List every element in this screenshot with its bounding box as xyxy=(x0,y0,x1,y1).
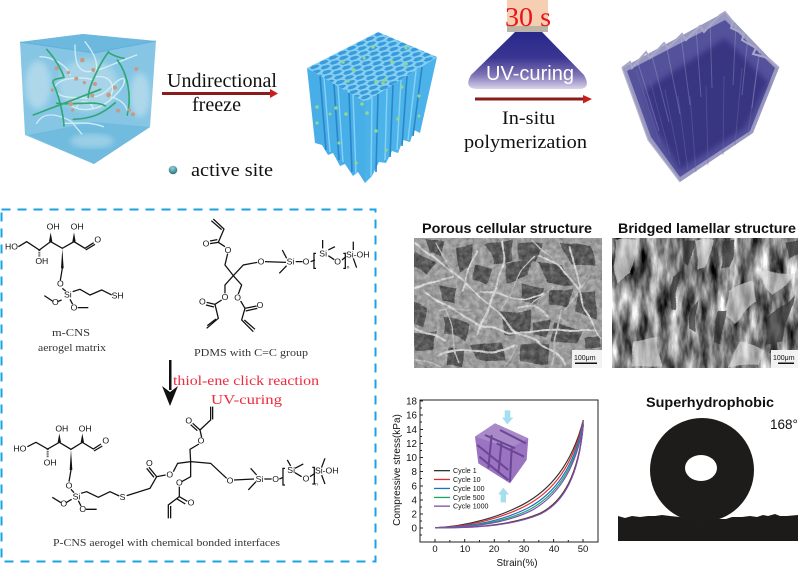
molecule: PDMS with C=C: O xyxy=(258,257,265,267)
x tick labels xyxy=(432,544,588,555)
molecule: m-CNS: OH xyxy=(47,222,60,232)
caption: m-CNS aerogel matrix: aerogel matrix xyxy=(38,343,107,354)
y tick labels: 0 xyxy=(412,524,418,534)
y tick labels: 16 xyxy=(406,410,418,422)
molecule: PDMS with C=C: O xyxy=(234,293,241,303)
honeycomb aerogel cube xyxy=(307,32,437,183)
label: Undirectional freeze: freeze xyxy=(192,94,241,116)
y tick labels: 12 xyxy=(406,439,417,450)
caption: m-CNS aerogel matrix xyxy=(38,328,107,354)
molecule: P-CNS product: O xyxy=(60,498,67,508)
molecule: P-CNS product: O xyxy=(146,458,153,468)
molecule: P-CNS product: O xyxy=(303,473,310,483)
molecule: PDMS with C=C: Si xyxy=(287,257,294,267)
heading: Superhydrophobic: Superhydrophobic xyxy=(646,395,775,410)
arrow: unidirectional freeze xyxy=(162,89,278,98)
molecule: P-CNS product: HO xyxy=(13,443,27,453)
scale bar 100 µm: 100μm xyxy=(574,355,596,362)
legend: cycles: Cycle 1 xyxy=(453,467,477,475)
SEM image: porous cellular structure xyxy=(413,238,602,368)
molecule: PDMS with C=C: Si xyxy=(319,248,327,258)
UV lamp timer: 30 s: 30 s xyxy=(505,2,551,32)
molecule: PDMS with C=C xyxy=(199,219,370,332)
label: In-situ polymerization: polymerization xyxy=(464,132,588,153)
arrow: in-situ polymerization xyxy=(475,95,592,104)
molecule: P-CNS product: n xyxy=(315,481,318,487)
molecule: P-CNS product: OH xyxy=(79,423,92,433)
molecule: m-CNS: OH xyxy=(71,222,84,232)
molecule: P-CNS product: OH xyxy=(44,458,57,468)
caption: m-CNS aerogel matrix: m-CNS xyxy=(52,328,90,339)
label: reaction conditions: UV-curing xyxy=(211,393,282,408)
legend: cycles: Cycle 100 xyxy=(453,485,485,493)
arrow: reaction direction xyxy=(162,360,178,406)
chart: compressive stress vs strain xyxy=(392,396,598,569)
scale bar 100 µm xyxy=(771,350,798,368)
molecule: PDMS with C=C: O xyxy=(334,257,341,267)
molecule: P-CNS product: O xyxy=(176,477,183,487)
x tick labels: 30 xyxy=(519,544,529,555)
molecule: P-CNS product: O xyxy=(166,469,173,479)
molecule: m-CNS: SH xyxy=(112,291,124,301)
y tick labels: 4 xyxy=(412,496,418,506)
y tick labels: 10 xyxy=(406,453,418,464)
x tick labels: 0 xyxy=(432,544,438,555)
x tick labels: 40 xyxy=(549,544,559,555)
x axis title: Strain(%) xyxy=(496,557,538,569)
water droplet on surface xyxy=(618,418,798,541)
molecule: P-CNS product: O xyxy=(66,480,73,490)
UV-curing light cone xyxy=(468,32,587,89)
molecule: PDMS with C=C: O xyxy=(257,300,264,310)
molecule: P-CNS product: Si xyxy=(73,492,80,502)
molecule: P-CNS product: Si xyxy=(287,465,295,475)
molecule: P-CNS product: Si xyxy=(256,474,263,484)
polymerized purple lamellar cube xyxy=(622,12,779,182)
legend: cycles: Cycle 500 xyxy=(453,494,485,502)
fibres xyxy=(33,42,138,134)
label: Undirectional freeze: Undirectional xyxy=(167,70,277,92)
molecule: P-CNS product: O xyxy=(272,474,279,484)
molecule: PDMS with C=C: O xyxy=(203,238,210,248)
molecule: P-CNS product: O xyxy=(188,498,195,508)
molecule: m-CNS: O xyxy=(94,235,101,245)
y tick labels: 8 xyxy=(412,467,418,478)
molecule: P-CNS product: O xyxy=(227,476,234,486)
y tick labels: 2 xyxy=(412,510,417,520)
x tick labels: 20 xyxy=(489,544,499,555)
molecule: m-CNS: O xyxy=(57,279,64,289)
molecule: m-CNS: OH xyxy=(35,256,48,266)
caption: PDMS with C=C group: PDMS with C=C group xyxy=(194,348,308,359)
molecule: P-CNS product: O xyxy=(198,436,205,446)
molecule: P-CNS product: O xyxy=(79,504,86,514)
molecule: PDMS with C=C: O xyxy=(303,257,310,267)
molecule: P-CNS product: O xyxy=(102,436,109,446)
molecule: PDMS with C=C: O xyxy=(225,245,232,255)
UV-curing light cone: UV-curing xyxy=(486,63,574,85)
x tick labels: 10 xyxy=(460,544,470,555)
molecule: PDMS with C=C: O xyxy=(199,297,206,307)
heading: Bridged lamellar structure: Bridged lamellar structure xyxy=(618,221,797,236)
molecule: P-CNS product: S xyxy=(120,492,126,502)
curves xyxy=(435,420,583,528)
legend: active site: active site xyxy=(191,160,273,181)
molecule: m-CNS: O xyxy=(71,302,78,312)
molecule: m-CNS: Si xyxy=(64,289,72,299)
scale bar 100 µm xyxy=(572,350,602,368)
molecule: PDMS with C=C: Si-OH xyxy=(346,250,370,260)
SEM image: bridged lamellar structure xyxy=(612,238,798,368)
contact angle label: 168° xyxy=(770,417,798,432)
label: reaction conditions: thiol-ene click reaction xyxy=(173,374,319,389)
y axis title: Compressive stress(kPa) xyxy=(392,414,403,526)
y tick labels: 6 xyxy=(412,482,418,492)
legend: cycles: Cycle 10 xyxy=(453,476,481,484)
molecule: P-CNS product: Si-OH xyxy=(315,466,339,476)
legend: cycles: Cycle 1000 xyxy=(453,502,489,510)
label: Undirectional freeze xyxy=(167,70,277,116)
heading: Porous cellular structure: Porous cellular structure xyxy=(422,221,593,236)
molecule: m-CNS: O xyxy=(52,297,59,307)
molecule: PDMS with C=C: O xyxy=(222,292,229,302)
label: reaction conditions xyxy=(173,374,319,408)
molecule: PDMS with C=C: n xyxy=(347,264,350,270)
x tick labels: 50 xyxy=(578,544,588,555)
panel: chemical reaction scheme xyxy=(2,210,376,562)
molecule: P-CNS product: O xyxy=(185,416,192,426)
label: In-situ polymerization xyxy=(464,108,588,153)
y tick labels xyxy=(406,396,418,534)
legend: cycles xyxy=(434,467,489,510)
molecule: P-CNS product: OH xyxy=(55,423,68,433)
caption: P-CNS aerogel: P-CNS aerogel with chemical bonded interfaces xyxy=(53,538,280,549)
molecule: P-CNS product xyxy=(13,407,339,518)
precursor cube with fibres xyxy=(20,34,156,164)
inset: compressed cube with arrows xyxy=(475,410,528,502)
label: In-situ polymerization: In-situ xyxy=(502,108,556,129)
y tick labels: 18 xyxy=(406,396,418,408)
molecule: m-CNS xyxy=(5,222,124,312)
scale bar 100 µm: 100μm xyxy=(773,355,795,362)
axis ticks xyxy=(420,401,583,542)
y tick labels: 14 xyxy=(406,425,418,436)
molecule: m-CNS: HO xyxy=(5,242,18,252)
